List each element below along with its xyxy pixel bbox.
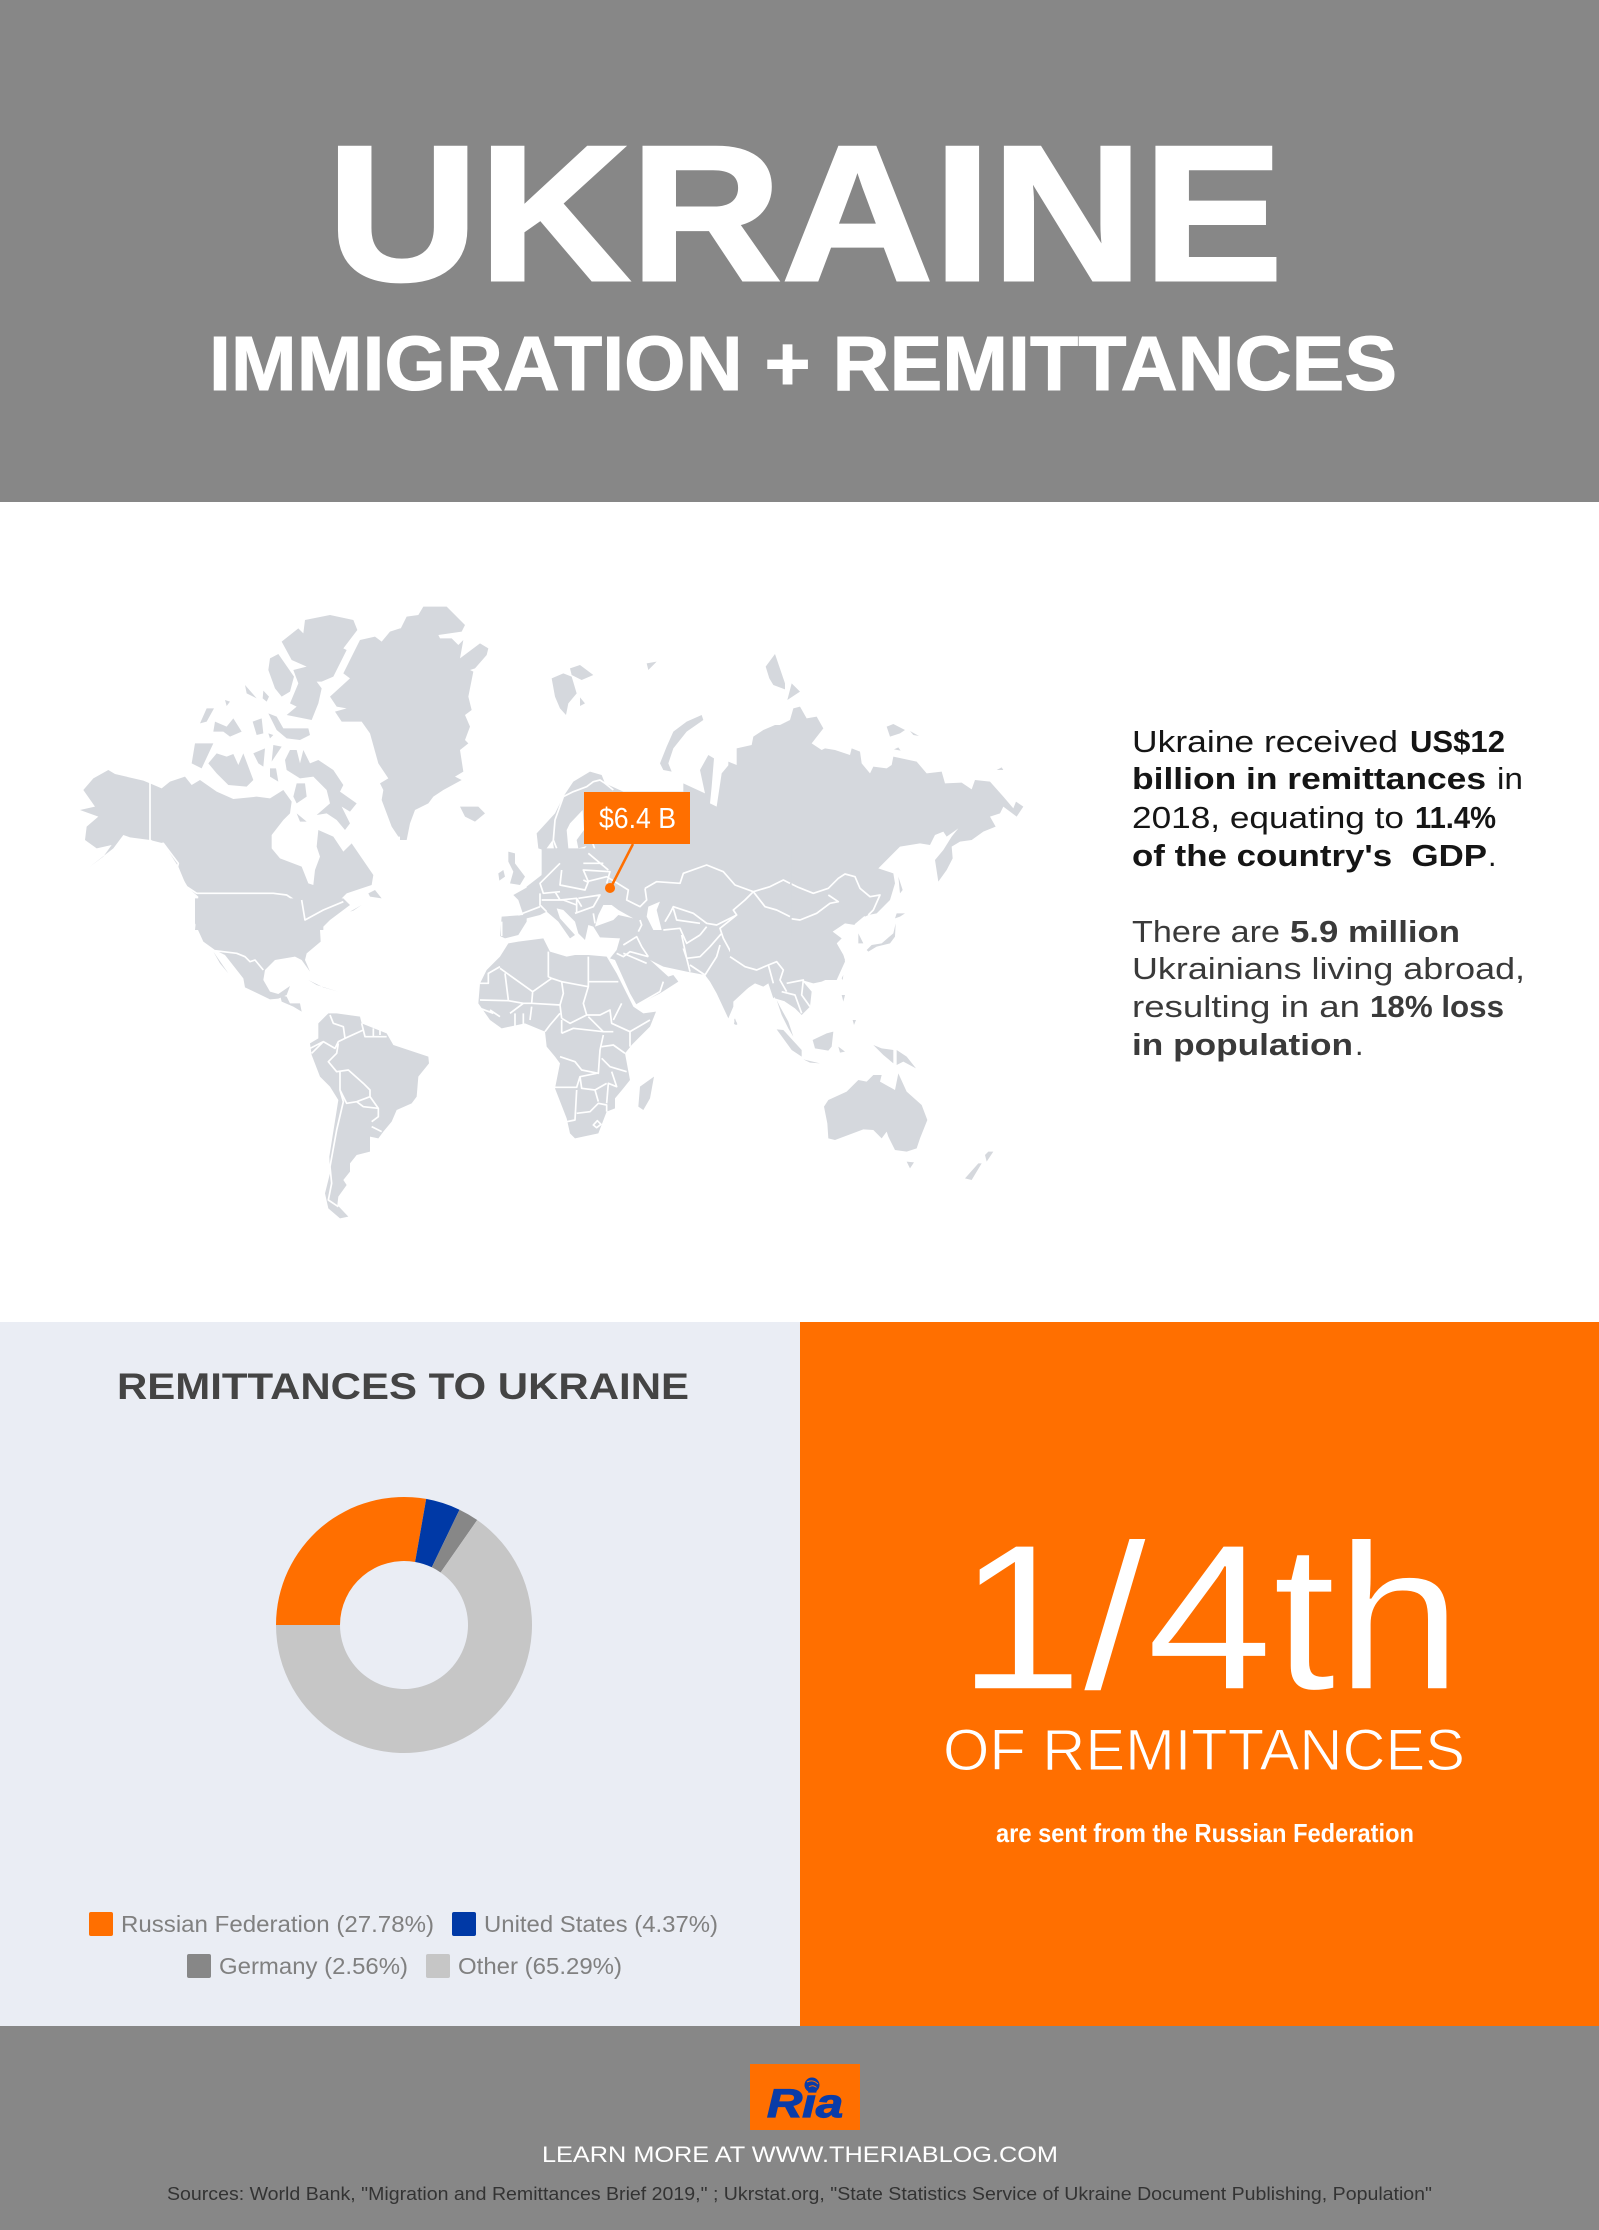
paragraph: US$12 billion: 2018, equating to	[1132, 801, 1404, 835]
paragraph: US$12 billion	[1132, 725, 1523, 873]
map callout: $6.4 B	[584, 792, 690, 893]
paragraph: 5.9 million: in population	[1132, 1028, 1353, 1062]
paragraph: 5.9 million: 5.9 million	[1290, 915, 1460, 949]
panel: world map	[80, 607, 1023, 1218]
paragraph: 5.9 million: .	[1355, 1028, 1363, 1062]
paragraph: US$12 billion: in	[1497, 762, 1523, 796]
chart legend	[89, 1911, 718, 1979]
paragraph: US$12 billion: US$12	[1410, 725, 1505, 759]
map callout: $6.4 B: $6.4 B	[599, 803, 676, 835]
panel: header	[0, 0, 1599, 502]
map: north america and arctic	[80, 615, 402, 930]
paragraph: 5.9 million	[1132, 915, 1525, 1062]
panel: remittances chart	[0, 1322, 800, 2026]
stat note: are sent from the Russian Federation	[996, 1818, 1414, 1848]
donut chart	[276, 1497, 532, 1753]
footer link text: LEARN MORE AT WWW.THERIABLOG.COM	[542, 2142, 1058, 2167]
big stat: 1/4th	[957, 1502, 1462, 1734]
title: UKRAINE	[327, 105, 1283, 321]
stat label: OF REMITTANCES	[943, 1718, 1465, 1783]
panel: 1/4th callout	[800, 1322, 1599, 2026]
paragraph: US$12 billion: .	[1488, 839, 1496, 873]
paragraph: 5.9 million: Ukrainians living abroad,	[1132, 952, 1525, 986]
paragraph: 5.9 million: resulting in an	[1132, 990, 1360, 1024]
chart legend: United States (4.37%)	[484, 1911, 718, 1937]
map: greenland, scandinavia and western russia	[400, 607, 732, 910]
paragraph: 5.9 million: There are	[1132, 915, 1280, 949]
panel: footer	[0, 2026, 1599, 2230]
chart heading: REMITTANCES TO UKRAINE	[117, 1365, 689, 1407]
map: europe, africa and south asia	[478, 848, 792, 1138]
map: eastern russia and east asia	[728, 654, 1023, 980]
chart legend: Other (65.29%)	[458, 1953, 622, 1979]
text block: remittance facts	[1132, 725, 1525, 1062]
paragraph: US$12 billion: Ukraine received	[1132, 725, 1398, 759]
chart legend: Germany (2.56%)	[219, 1953, 408, 1979]
subtitle: IMMIGRATION + REMITTANCES	[209, 321, 1397, 407]
paragraph: US$12 billion: of the country's GDP	[1132, 839, 1487, 873]
map: southeast asia and oceania	[730, 937, 993, 1180]
map: america south of canada	[195, 898, 429, 1218]
paragraph: US$12 billion: billion in remittances	[1132, 762, 1486, 796]
chart legend: Russian Federation (27.78%)	[121, 1911, 434, 1937]
logo: Ria	[750, 2064, 860, 2130]
sources: Sources: World Bank, "Migration and Remittances Brief 2019," ; Ukrstat.org, "State Statistics Service of Ukraine Document Publishing, Population"	[167, 2183, 1432, 2204]
paragraph: US$12 billion: 11.4%	[1415, 801, 1496, 835]
logo: Ria: Ria	[767, 2082, 843, 2126]
paragraph: 5.9 million: 18% loss	[1370, 990, 1504, 1024]
